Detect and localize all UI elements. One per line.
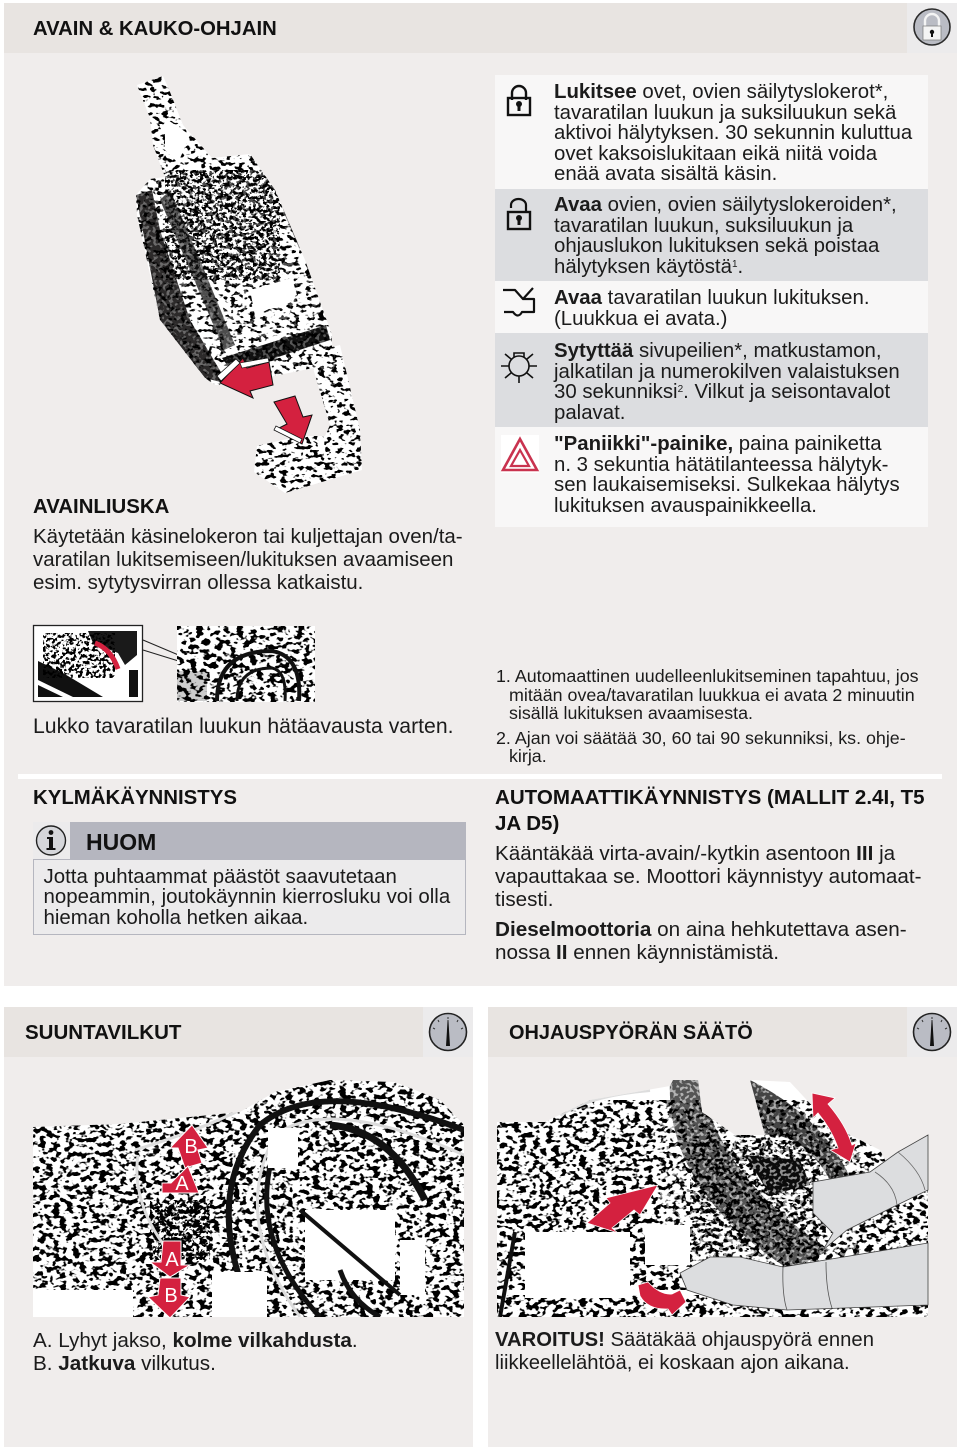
heading: avain ja kauko-ohjain: AVAIN & KAUKO-OHJAIN	[33, 18, 277, 40]
body text: avainliuska: Käytetään käsinelokeron tai kuljettajan oven/ta-	[33, 524, 463, 548]
text: paniikki	[554, 433, 900, 516]
detail photo	[177, 626, 315, 702]
leader lines	[143, 640, 177, 661]
section: automaattikaynnistys	[495, 786, 925, 964]
text: paniikki: "Paniikki"-painike, paina painiketta	[554, 433, 882, 455]
arrow: b down	[148, 1278, 190, 1318]
text: sytyttaa: palavat.	[554, 402, 625, 424]
note body: hieman koholla hetken aikaa.	[44, 906, 308, 929]
text: avaa tavaratila: Avaa tavaratilan luukun lukituksen.	[554, 287, 870, 309]
row: trunk	[495, 281, 928, 333]
icon: info	[33, 822, 70, 859]
caption: suuntavilkut: B. Jatkuva vilkutus.	[33, 1352, 216, 1375]
arrow: b up: B	[184, 1136, 198, 1158]
caption: trunk lock: Lukko tavaratilan luukun hätäavausta varten.	[33, 714, 454, 738]
note header	[33, 822, 466, 859]
arrow: a up	[162, 1166, 199, 1195]
caption: varoitus: VAROITUS! Säätäkää ohjauspyörä ennen	[495, 1329, 874, 1351]
icon: trunk	[503, 287, 536, 317]
text: avaa tavaratila	[554, 287, 870, 330]
text: lukitsee: enää avata sisältä käsin.	[554, 163, 777, 185]
caption: varoitus	[495, 1329, 874, 1374]
text block: avainliuska	[33, 496, 463, 594]
body: automaattikaynnistys: Kääntäkää virta-avain/-kytkin asentoon III ja	[495, 842, 895, 865]
footnotes	[496, 666, 919, 766]
text: avaa: hälytyksen käytöstä1.	[554, 256, 743, 278]
arrow: a down	[150, 1241, 190, 1277]
icon tile: gauge	[423, 1007, 473, 1057]
illustration: turn signal stalk	[33, 1080, 464, 1318]
caption: suuntavilkut	[33, 1329, 358, 1375]
body: automaattikaynnistys	[495, 842, 921, 911]
text: paniikki: n. 3 sekuntia hätätilanteessa hälytyk-	[554, 454, 888, 476]
caption: suuntavilkut: A. Lyhyt jakso, kolme vilkahdusta.	[33, 1329, 358, 1352]
illustration: steering wheel adjustment	[497, 1080, 928, 1317]
arrow: b up	[170, 1125, 208, 1168]
text: avaa tavaratila: (Luukkua ei avata.)	[554, 308, 727, 330]
text: avaa	[554, 194, 897, 278]
panel: remote button list	[495, 75, 928, 527]
body: dieselmoottori	[495, 918, 907, 964]
note body: nopeammin, joutokäynnin kierrosluku voi olla	[44, 885, 450, 908]
text: sytyttaa: 30 sekunniksi2. Vilkut ja seisontavalot	[554, 381, 890, 403]
text: lukitsee: ovet kaksoislukitaan eikä niitä voida	[554, 142, 877, 164]
row: panic	[495, 427, 928, 527]
icon: hazard triangle	[500, 436, 540, 472]
heading: avain ja kauko-ohjain	[4, 3, 907, 53]
text: lukitsee	[554, 81, 912, 185]
arrow: height adjustment	[812, 1093, 856, 1162]
text: avaa: Avaa ovien, ovien säilytyslokeroiden*,	[554, 194, 897, 216]
icon: open lock	[506, 198, 532, 230]
arrow: a up: A	[175, 1173, 189, 1195]
hand: upper	[813, 1135, 928, 1250]
text: sytyttaa: jalkatilan ja numerokilven valaistuksen	[554, 360, 900, 382]
icon: closed lock	[506, 84, 532, 116]
arrow: reach adjustment	[587, 1185, 658, 1233]
note body	[33, 859, 466, 935]
heading: ohjauspyoran saato	[488, 1007, 907, 1057]
body: automaattikaynnistys: vapauttakaa se. Moottori käynnistyy automaat-	[495, 865, 921, 888]
row: approach light	[495, 333, 928, 427]
icon: light bulb	[501, 352, 537, 383]
icon tile: lock	[907, 3, 957, 53]
heading: kylmakaynnistys: KYLMÄKÄYNNISTYS	[33, 787, 237, 809]
text: lukitsee: aktivoi hälytyksen. 30 sekunnin kuluttua	[554, 122, 912, 144]
arrow: slide release	[217, 358, 273, 398]
text: paniikki: lukituksen avauspainikkeella.	[554, 494, 817, 516]
text: avaa: ohjauslukon lukituksen sekä poistaa	[554, 235, 879, 257]
footnotes: mitään ovea/tavaratilan luukkua ei avata 2 minuutin	[509, 684, 915, 704]
icon tile: gauge	[907, 1007, 957, 1057]
illustration: trunk emergency lock	[32, 624, 315, 702]
heading: suuntavilkut	[4, 1007, 423, 1057]
body text: avainliuska	[33, 524, 463, 594]
text: paniikki: sen laukaisemiseksi. Sulkekaa hälytys	[554, 474, 900, 496]
heading: automaattikaynnistys: AUTOMAATTIKÄYNNISTYS (MALLIT 2.4I, T5	[495, 786, 925, 809]
arrow: b down: B	[164, 1285, 178, 1307]
section: kylmakaynnistys	[33, 786, 466, 935]
body text: avainliuska: esim. sytytysvirran ollessa katkaistu.	[33, 570, 363, 594]
panel: suuntavilkut	[4, 1007, 473, 1447]
heading: automaattikaynnistys	[495, 786, 925, 835]
body: automaattikaynnistys: tisesti.	[495, 888, 553, 911]
panel: ohjauspyoran saato	[488, 1007, 957, 1447]
inset photo	[32, 624, 144, 702]
body: dieselmoottori: Dieselmoottoria on aina hehkutettava asen-	[495, 918, 907, 941]
row: lock	[495, 75, 928, 189]
body: dieselmoottori: nossa II ennen käynnistämistä.	[495, 941, 779, 964]
text: lukitsee: Lukitsee ovet, ovien säilytyslokerot*,	[554, 81, 888, 103]
text: sytyttaa: Sytyttää sivupeilien*, matkustamon,	[554, 340, 882, 362]
heading: automaattikaynnistys: JA D5)	[495, 812, 559, 835]
footnotes: sisällä lukituksen avaamisesta. 2. Ajan voi säätää 30, 60 tai 90 sekunniksi, ks. ohje-	[496, 703, 906, 748]
arrow: remove key blade	[274, 396, 312, 444]
heading: ohjauspyoran saato: OHJAUSPYÖRÄN SÄÄTÖ	[509, 1022, 753, 1044]
body text: avainliuska: varatilan lukitsemiseen/lukituksen avaamiseen	[33, 548, 453, 570]
panel: avain ja kauko-ohjain	[4, 3, 957, 986]
arrow: lever	[638, 1282, 686, 1315]
text: lukitsee: tavaratilan luukun ja suksiluukun sekä	[554, 102, 896, 124]
caption: varoitus: liikkeellelähtöä, ei koskaan ajon aikana.	[495, 1352, 850, 1374]
note body: Jotta puhtaammat päästöt saavutetaan	[44, 864, 397, 888]
heading: avainliuska: AVAINLIUSKA	[33, 496, 169, 518]
arrow: a down: A	[165, 1249, 179, 1271]
hand: lower	[680, 1243, 928, 1310]
footnotes: kirja.	[509, 746, 547, 766]
illustration: key fob with red arrows	[136, 76, 362, 493]
heading: suuntavilkut: SUUNTAVILKUT	[25, 1021, 181, 1044]
text: avaa: tavaratilan luukun, suksiluukun ja	[554, 214, 853, 236]
label: huom: HUOM	[86, 829, 156, 855]
footnotes: 1. Automaattinen uudelleenlukitseminen tapahtuu, jos	[496, 666, 919, 686]
row: unlock	[495, 189, 928, 281]
text: sytyttaa	[554, 340, 900, 424]
